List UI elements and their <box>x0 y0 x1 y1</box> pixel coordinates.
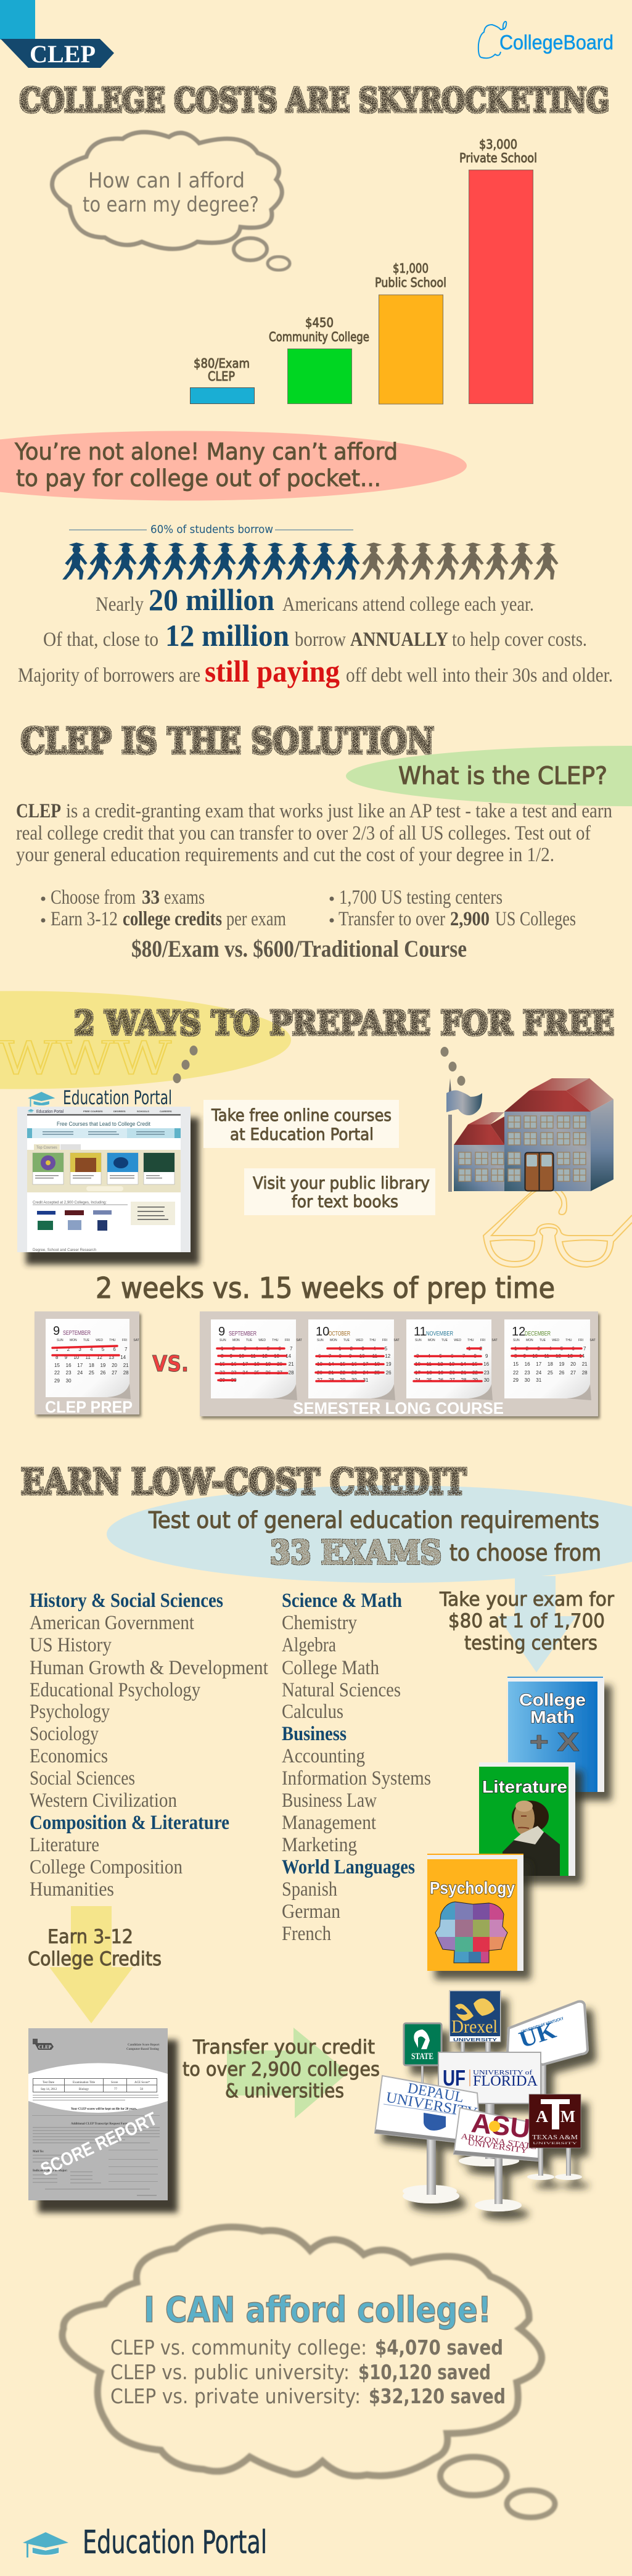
exam list: right column: Spanish <box>282 1878 337 1901</box>
exam list: right column: Business <box>282 1723 347 1745</box>
calendar: September: SEPTEMBER <box>229 1331 256 1337</box>
bullet list: left column: Earn 3-12 <box>51 908 118 930</box>
stat: 12 million borrow: ANNUALLY <box>350 629 448 651</box>
sign: University of Kentucky: UNIVERSITY OF KENTUCKY <box>520 2017 565 2034</box>
pictogram: 60% of students borrow: 60% of students borrow <box>150 523 273 536</box>
poles <box>421 2042 571 2204</box>
cloud text: to earn my degree? <box>83 192 259 217</box>
callout: test out of requirements: to choose from <box>449 1540 601 1566</box>
33 exams: 33 EXAMS <box>270 1534 441 1572</box>
score report document: Computer-Based Testing <box>126 2048 159 2051</box>
calendar: October: 10 <box>316 1325 329 1339</box>
students who borrow <box>63 543 359 579</box>
sign: DePaul University: UNIVERSITY <box>385 2089 478 2121</box>
exam list: right column: College Math <box>282 1657 379 1679</box>
score report document: Indicate College of Major: <box>33 2169 68 2173</box>
book: Psychology <box>427 1854 523 1971</box>
website screenshot: FREE COURSES <box>83 1110 103 1113</box>
savings lines: CLEP vs. private university: <box>110 2384 361 2408</box>
bar: public school: Public School <box>375 275 446 290</box>
stat: 12 million borrow <box>43 618 587 653</box>
college signs cluster <box>375 1991 588 2211</box>
calendar: September: 8 9 10 11 12 13 14 <box>221 1353 292 1359</box>
website screenshot: Education Portal <box>36 1110 64 1114</box>
bar: community college <box>269 315 369 403</box>
text: take your exam: Take your exam for <box>439 1588 614 1611</box>
footer: Education Portal logo <box>23 2524 267 2561</box>
College Board wordmark: CollegeBoard <box>499 31 614 54</box>
sign: Drexel University <box>449 1991 501 2042</box>
calendar: September 2 weeks: SUN MON TUE WED THU FRI SAT <box>57 1339 139 1342</box>
text: earn 3-12 college credits: College Credits <box>28 1948 162 1970</box>
stat: 12 million borrow: Of that, close to <box>43 629 158 651</box>
exam list: left column: Sociology <box>30 1723 99 1745</box>
bullet list: right column: 2,900 <box>450 908 490 930</box>
strike-through days <box>52 1346 119 1355</box>
exam list: right column: Calculus <box>282 1701 343 1723</box>
sign: Texas A&M: A <box>536 2107 549 2126</box>
sign: University of Florida: FLORIDA <box>473 2073 538 2089</box>
exam list: right column: Accounting <box>282 1745 365 1767</box>
calendar: September 2 weeks: 15 16 17 18 19 20 21 <box>54 1363 129 1368</box>
calendar: October <box>308 1319 400 1400</box>
College Board logo <box>478 22 614 58</box>
book: Literature <box>479 1762 575 1876</box>
calendar: December: 29 30 31 <box>513 1377 542 1383</box>
bar: community college: $450 <box>305 315 334 330</box>
yellow blob with www <box>0 991 291 1089</box>
exam list: right column: World Languages <box>282 1856 415 1878</box>
stat: 20 million attend: Americans attend college each year. <box>282 593 534 616</box>
text: transfer your credit: to over 2,900 colleges <box>183 2058 380 2081</box>
score report document: Candidate Score Report <box>128 2044 160 2047</box>
exam list: right column: Business Law <box>282 1790 377 1812</box>
callout: what is the CLEP <box>346 746 632 806</box>
exam list: right column: Information Systems <box>282 1767 431 1790</box>
exam list: right column: German <box>282 1901 340 1923</box>
sign: DePaul University <box>375 2076 481 2145</box>
website screenshot: Top Courses <box>36 1146 57 1150</box>
sign: Arizona State University <box>454 2108 538 2161</box>
sign: University of Florida <box>438 2052 541 2103</box>
sign: Drexel University: Drexel <box>451 2017 498 2037</box>
exam list: right column: Marketing <box>282 1834 357 1856</box>
score table: Test Date <box>43 2081 55 2084</box>
exam list: left column: American Government <box>30 1612 194 1634</box>
text: earn 3-12 college credits <box>28 1926 162 1970</box>
text: transfer your credit: & universities <box>225 2080 344 2102</box>
bullet list: right column <box>329 886 576 930</box>
paragraph: CLEP description <box>16 800 612 866</box>
calendar: October: SUN MON TUE WED THU FRI SAT <box>317 1339 400 1342</box>
stat: 20 million attend: Nearly <box>96 593 144 616</box>
CLEP ribbon logo <box>0 0 114 68</box>
exam list: left column: Social Sciences <box>30 1767 135 1790</box>
pole bases <box>403 2155 582 2211</box>
exam list: right column: Management <box>282 1812 376 1834</box>
yellow blob with www: WWW <box>0 1032 171 1085</box>
bullet list: left column: 33 <box>142 886 160 909</box>
calendar: November: 11 <box>414 1325 427 1339</box>
calendar: October: 13 14 15 16 17 18 19 <box>317 1361 392 1367</box>
calendar: November <box>406 1319 498 1400</box>
exam list: left column: History & Social Sciences <box>30 1590 223 1612</box>
callout: public library <box>244 1168 435 1215</box>
calendar: September <box>211 1319 302 1400</box>
stat: 12 million borrow: to help cover costs. <box>452 629 587 651</box>
bar: public school <box>375 261 446 404</box>
savings lines: $32,120 saved <box>369 2384 506 2408</box>
callout: what is the CLEP: What is the CLEP? <box>398 762 607 790</box>
bullet list: right column: 1,700 US testing centers <box>339 886 503 909</box>
label: semester long course: SEMESTER LONG COURSE <box>293 1399 504 1418</box>
students who do not borrow <box>360 543 558 579</box>
sign: Texas A&M: UNIVERSITY <box>533 2142 578 2145</box>
heading: CLEP is the solution: CLEP IS THE SOLUTION <box>21 720 434 762</box>
calendar: December: 15 16 17 18 19 20 21 <box>513 1361 588 1367</box>
calendar: September 2 weeks: 29 30 <box>54 1378 72 1384</box>
book: College Math: College <box>519 1690 586 1709</box>
book: College Math: + X <box>530 1727 579 1756</box>
calendar: November: 10 11 12 13 14 15 16 <box>415 1361 490 1367</box>
callout: free online courses: at Education Portal <box>230 1125 374 1144</box>
calendar: November: NOVEMBER <box>426 1331 453 1337</box>
text: take your exam: testing centers <box>464 1632 597 1654</box>
thought dots: right <box>440 1047 465 1086</box>
score table: Sep 14, 2012 <box>41 2088 57 2091</box>
thought dots: left <box>173 1046 197 1083</box>
sign: University of Kentucky <box>507 2002 588 2065</box>
cloud text: How can I afford <box>88 168 245 193</box>
calendar: September 2 weeks: SEPTEMBER <box>63 1330 91 1337</box>
calendar: September 2 weeks: 9 <box>53 1324 60 1338</box>
exam list: left column: Economics <box>30 1745 108 1767</box>
exam list: right column: Science & Math <box>282 1590 402 1612</box>
calendar: September: 15 16 17 18 19 20 21 <box>220 1361 294 1367</box>
calendar: September: 1 2 3 4 5 6 7 <box>221 1346 293 1352</box>
exam list: right column: French <box>282 1923 331 1945</box>
sign: Texas A&M: TEXAS A&M <box>532 2134 578 2141</box>
exam list: left column: Literature <box>30 1834 99 1856</box>
sign: University of Kentucky: UK <box>516 2017 559 2054</box>
exam list: right column <box>282 1590 431 1945</box>
calendar: September 2 weeks: 1 2 3 4 5 6 7 <box>55 1347 128 1352</box>
website screenshot: Free Courses that Lead to College Credit <box>57 1121 150 1128</box>
callout: you're not alone: to pay for college out of pocket... <box>16 465 381 492</box>
calendar: November: SUN MON TUE WED THU FRI SAT <box>415 1339 498 1342</box>
calendar: December: DECEMBER <box>525 1331 551 1337</box>
exam list: left column: Human Growth & Development <box>30 1657 268 1679</box>
calendar: September 2 weeks: 22 23 24 25 26 27 28 <box>54 1370 129 1376</box>
calendar: October: 1 2 3 4 5 <box>339 1346 388 1352</box>
bullet list: left column: per exam <box>226 908 286 930</box>
callout: free online courses <box>203 1100 399 1148</box>
score table <box>33 2078 157 2092</box>
exam list: left column: Educational Psychology <box>30 1679 200 1701</box>
calendar: September: 22 23 24 25 26 27 28 <box>220 1370 294 1376</box>
callout: test out of requirements <box>148 1507 601 1572</box>
bar: CLEP: $80/Exam <box>194 356 250 371</box>
callout: you're not alone: You’re not alone! Many can’t afford <box>14 439 398 465</box>
outline eyeglasses <box>483 1191 632 1267</box>
bar chart: cost comparison <box>190 137 537 404</box>
bar: public school: $1,000 <box>393 261 429 276</box>
book: College Math <box>507 1677 604 1792</box>
bullet list: left column <box>41 886 286 930</box>
text: take your exam <box>439 1588 614 1654</box>
exam list: right column: Natural Sciences <box>282 1679 401 1701</box>
windows <box>459 1116 586 1181</box>
calendar: December <box>504 1319 596 1400</box>
exam list: left column <box>30 1590 268 1901</box>
pictogram: 60% of students borrow <box>63 523 558 579</box>
book: Psychology: Psychology <box>430 1878 515 1897</box>
score table: Score <box>111 2081 118 2084</box>
exam list: left column: Humanities <box>30 1878 114 1901</box>
Education Portal logo small: Education Portal <box>63 1087 172 1109</box>
exam list: left column: Composition & Literature <box>30 1812 229 1834</box>
footer: Education Portal logo: Education Portal <box>83 2524 267 2561</box>
bar: CLEP: CLEP <box>208 369 235 384</box>
bullet list: left column: exams <box>164 886 205 909</box>
arrow: earn credits <box>28 1906 162 2023</box>
sign: Drexel University: UNIVERSITY <box>453 2038 498 2042</box>
stat: 12 million borrow: 12 million <box>165 618 289 653</box>
score table: 50 <box>140 2088 143 2091</box>
bullet list: left column: Choose from <box>51 886 136 909</box>
stat: 20 million attend <box>96 582 534 617</box>
heading: earn low-cost credit: EARN LOW-COST CREDIT <box>21 1461 466 1503</box>
arrow: transfer credit <box>183 2028 380 2118</box>
sign: Arizona State University: UNIVERSITY <box>467 2137 528 2155</box>
calendar: November: 17 18 19 20 21 22 23 <box>415 1370 490 1376</box>
calendar: December: 12 <box>512 1325 525 1339</box>
sign: Michigan State: STATE <box>411 2052 433 2062</box>
school building illustration <box>446 1078 614 1192</box>
bullet list: left column: college credits <box>123 908 222 930</box>
cloud text <box>83 168 259 217</box>
paragraph: CLEP description: your general education requirements and cut the cost of your degree in 1/2. <box>16 844 554 866</box>
book: College Math: Math <box>530 1707 575 1727</box>
Education Portal logo small <box>28 1087 172 1109</box>
bullet list: right column: US Colleges <box>495 908 576 930</box>
sign: Michigan State <box>404 2023 441 2065</box>
calendar: November: 3 4 5 6 7 8 9 <box>416 1353 488 1359</box>
calendar: October: 20 21 22 23 24 25 26 <box>317 1370 392 1376</box>
savings lines: CLEP vs. community college: <box>110 2335 367 2359</box>
website screenshot: DEGREES <box>113 1110 126 1113</box>
calendar: November: 1 2 <box>468 1346 483 1352</box>
stat: 12 million borrow: borrow <box>295 629 346 651</box>
calendar: September 2 weeks: 8 9 10 11 12 13 14 <box>55 1355 126 1360</box>
savings lines <box>110 2335 506 2408</box>
calendar: December: 8 9 10 11 12 13 14 <box>514 1353 585 1359</box>
sign: Arizona State University: ASU <box>470 2108 532 2144</box>
callout: public library: for text books <box>292 1192 398 1212</box>
puzzle heads icon <box>432 1900 509 1964</box>
stat: still paying <box>18 654 613 688</box>
flag and pole <box>446 1078 482 1192</box>
score report document: Additional CLEP Transcript Request Form <box>71 2123 128 2126</box>
score table: Biology <box>79 2088 89 2091</box>
exam list: left column: US History <box>30 1634 112 1656</box>
score table: 77 <box>114 2088 117 2091</box>
calendar: December: 22 23 24 25 26 27 28 <box>513 1370 588 1376</box>
savings lines: CLEP vs. public university: <box>110 2360 350 2384</box>
calendar: December: 1 2 3 4 5 6 7 <box>514 1346 586 1352</box>
bullet list: right column: Transfer to over <box>339 908 445 930</box>
website screenshot: CAREERS <box>160 1110 172 1113</box>
calendar: September: SUN MON TUE WED THU FRI SAT <box>220 1339 302 1342</box>
bar: private school: $3,000 <box>479 137 517 152</box>
score report document: Your CLEP scores will be kept on file for 20 years. <box>71 2108 137 2111</box>
score report stamp text: SCORE REPORT <box>38 2108 160 2180</box>
sign: DePaul University: DEPAUL <box>406 2080 465 2106</box>
score report document <box>28 2028 178 2213</box>
door <box>525 1152 554 1191</box>
bar: CLEP <box>190 356 254 403</box>
sign: University of Florida: UF <box>443 2065 466 2091</box>
savings lines: $4,070 saved <box>375 2335 503 2359</box>
mini CLEP logo: CLEP <box>38 2044 51 2050</box>
calendar: December: SUN MON TUE WED THU FRI SAT <box>513 1339 596 1342</box>
exam list: right column: Algebra <box>282 1634 336 1656</box>
calendar: September: 29 30 <box>220 1377 237 1383</box>
exam list: right column: Chemistry <box>282 1612 357 1634</box>
thought cloud: how can I afford <box>52 132 290 270</box>
text: transfer your credit <box>183 2036 380 2102</box>
book: Literature: Literature <box>482 1777 567 1796</box>
website screenshot <box>17 1107 199 1265</box>
exam list: left column: Psychology <box>30 1701 110 1723</box>
website screenshot: SCHOOLS <box>137 1110 149 1113</box>
callout: test out of requirements: Test out of general education requirements <box>148 1507 599 1534</box>
stat: 20 million attend: 20 million <box>149 582 274 617</box>
callout: public library: Visit your public library <box>253 1174 430 1193</box>
score table: ACE Score* <box>134 2081 150 2084</box>
portrait: Shakespeare <box>503 1801 560 1876</box>
mini CLEP logo <box>33 2039 54 2050</box>
calendar: November: 24 25 26 27 28 29 30 <box>415 1377 490 1383</box>
vs label: VS. <box>152 1352 189 1377</box>
bar: community college: Community College <box>269 329 369 344</box>
calendar: September 2 weeks <box>46 1319 139 1399</box>
calendar: October: 27 28 29 30 31 <box>317 1377 369 1383</box>
bar: private school <box>459 137 537 403</box>
bar: private school: Private School <box>459 151 537 165</box>
paragraph: CLEP description: CLEP <box>16 800 61 822</box>
price comparison line: $80/Exam vs. $600/Traditional Course <box>131 936 467 962</box>
calendar: October: 6 7 8 9 10 11 12 <box>318 1353 391 1359</box>
heading: I can afford college: I CAN afford college! <box>144 2290 491 2330</box>
blue ellipse and arrow <box>107 1485 632 1672</box>
text: take your exam: $80 at 1 of 1,700 <box>448 1610 605 1632</box>
exam list: left column: Western Civilization <box>30 1790 177 1812</box>
CLEP logo wordmark: CLEP <box>30 40 96 68</box>
sign: University of Florida: UNIVERSITY of <box>473 2069 532 2076</box>
callout: free online courses: Take free online courses <box>211 1106 392 1125</box>
calendar: October: OCTOBER <box>329 1331 350 1337</box>
stat: still paying: Majority of borrowers are <box>18 664 200 687</box>
panel: CLEP prep calendar <box>35 1311 139 1416</box>
website screenshot: Degree, School and Career Research <box>33 1248 96 1252</box>
score report document: Mail To: <box>33 2150 44 2153</box>
savings lines: $10,120 saved <box>358 2360 491 2384</box>
heading: 2 weeks vs 15 weeks: 2 weeks vs. 15 weeks of prep time <box>96 1271 555 1305</box>
sign: Texas A&M <box>529 2094 581 2148</box>
exam list: left column: College Composition <box>30 1856 183 1878</box>
panel: semester long course calendars <box>200 1311 598 1418</box>
sign: Texas A&M: M <box>560 2107 575 2126</box>
sign: Arizona State University: ARIZONA STATE <box>461 2131 538 2151</box>
text: earn 3-12 college credits: Earn 3-12 <box>47 1926 133 1948</box>
thought cloud: I can afford college <box>62 2227 555 2517</box>
score table: Examination Title <box>73 2081 96 2084</box>
document text lines <box>32 2095 160 2196</box>
text: transfer your credit: Transfer your credit <box>192 2036 375 2058</box>
label: CLEP prep: CLEP PREP <box>45 1398 133 1416</box>
calendar: September: 9 <box>218 1325 225 1339</box>
stat: still paying: still paying <box>205 654 340 688</box>
callout: you're not alone <box>0 431 467 501</box>
website screenshot: Credit Accepted at 2,900 Colleges, Including: <box>33 1200 107 1205</box>
